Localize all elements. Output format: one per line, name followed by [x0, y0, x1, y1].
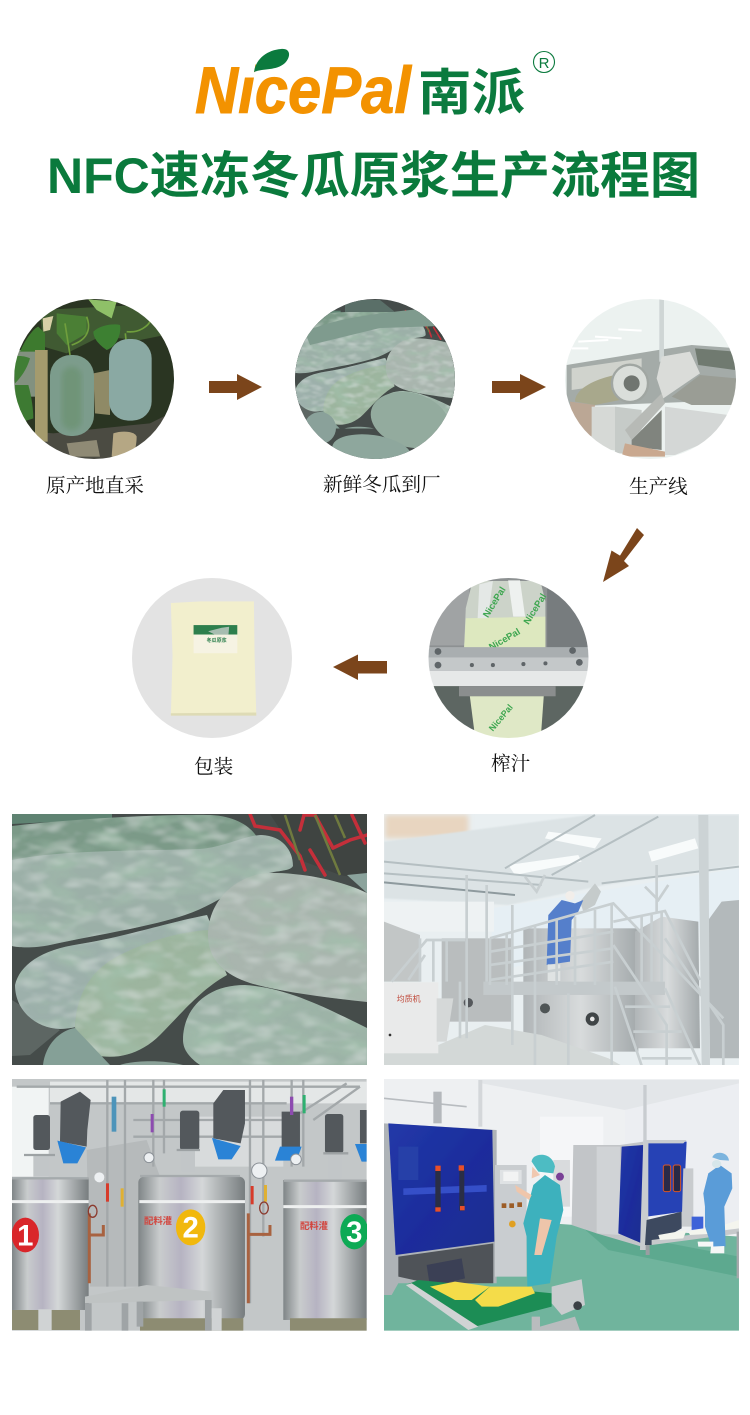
photo panel: winter melon pile — [12, 814, 367, 1065]
photo panel: numbered batching tanks: 配料灌 — [144, 1215, 172, 1226]
product bag — [171, 601, 256, 716]
caption: step 3: 生产线 — [629, 476, 688, 498]
registered mark — [534, 52, 554, 72]
step 2 photo: fresh winter melons — [295, 299, 455, 459]
registered mark: R — [539, 55, 550, 72]
caption: step 4: 榨汁 — [491, 753, 530, 775]
step 4 photo: juicing and filling: NicePal — [481, 585, 509, 620]
arrow: step 1 to 2 — [209, 374, 262, 400]
product bag: 冬瓜原浆 — [206, 637, 227, 644]
step 4 photo: juicing and filling: NicePal — [522, 592, 549, 627]
logo wordmark: NicePal — [195, 53, 412, 127]
arrow: step 2 to 3 — [492, 374, 546, 400]
caption: step 1: 原产地直采 — [46, 475, 144, 497]
photo panel: numbered batching tanks: 3 — [346, 1216, 362, 1249]
photo panel: numbered batching tanks: 2 — [182, 1212, 199, 1245]
arrow: step 4 to 5 — [333, 654, 387, 680]
logo — [195, 49, 554, 127]
step 1 photo: gourds on vine — [10, 297, 180, 463]
logo leaf — [239, 49, 289, 74]
step 4 photo: juicing and filling: NicePal — [487, 702, 515, 733]
step 3 photo: production line — [562, 297, 738, 460]
logo Chinese name: 南派 — [418, 65, 525, 121]
title: NFC速冻冬瓜原浆生产流程图 — [47, 148, 700, 204]
photo panel: numbered batching tanks — [12, 1079, 368, 1331]
photo panel: mixing tanks platform — [384, 814, 739, 1066]
arrow: step 3 to 4 — [603, 528, 644, 582]
step 4 photo: juicing and filling — [428, 578, 588, 738]
photo panel: numbered batching tanks: 配料灌 — [300, 1220, 328, 1231]
photo panel: packing machines and workers — [384, 1079, 739, 1331]
caption: step 2: 新鲜冬瓜到厂 — [323, 474, 441, 496]
caption: step 5: 包装 — [194, 756, 233, 778]
photo panel: mixing tanks platform: 均质机 — [397, 994, 421, 1004]
step 5 photo: packaged product — [132, 578, 292, 738]
photo panel: numbered batching tanks: 1 — [17, 1219, 33, 1252]
step 4 photo: juicing and filling: NicePal — [487, 626, 522, 653]
